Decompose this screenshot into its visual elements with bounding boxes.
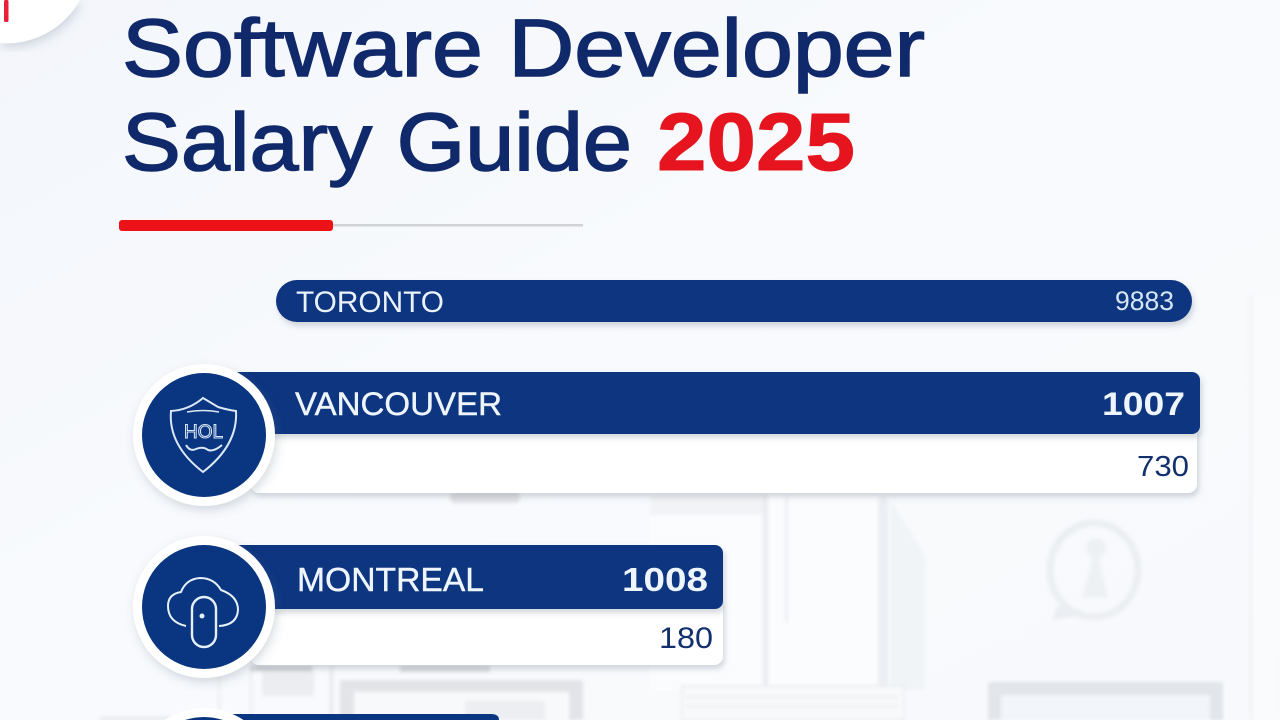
background: right wall panel [1250,295,1280,720]
top-left logo badge [0,0,80,43]
background: shadow under Vancouver card [450,492,520,503]
background: chat bubble icon [1050,523,1138,620]
title underline [119,220,583,231]
row: Montreal [133,536,723,678]
Montreal white card [250,600,723,665]
Vancouver value: 1007 [1102,386,1185,422]
title [122,3,925,188]
row: fourth city (cropped) [164,708,499,720]
background: shelves behind Montreal [100,665,490,720]
title year: 2025 [657,97,855,188]
icon: Montreal cloud badge [133,536,275,678]
background: centre screen [682,686,904,720]
title line 1: Software Developer [122,3,925,94]
fourth row navy bar [230,714,499,720]
Toronto value: 9883 [1115,286,1174,316]
background: left monitor [340,680,583,720]
icon: Vancouver shield badge [133,364,275,506]
title line 2: Salary Guide [122,97,632,188]
Vancouver white card [250,425,1197,493]
Vancouver navy bar [230,372,1200,434]
Toronto label: TORONTO [296,286,444,319]
background: server towers [650,495,925,690]
Montreal secondary value: 180 [659,622,713,655]
fourth row badge [164,708,244,720]
Montreal label: MONTREAL [297,561,484,598]
row: Vancouver [133,364,1200,506]
icon: Vancouver shield badge: HOL [184,422,223,443]
background: right monitor [988,682,1223,720]
Montreal value: 1008 [622,561,708,598]
Vancouver label: VANCOUVER [295,386,502,422]
logo red mark [4,0,8,22]
faded background office scene [100,295,1280,720]
Montreal navy bar [230,545,723,609]
row: Toronto [276,280,1192,322]
Vancouver secondary value: 730 [1137,451,1189,483]
